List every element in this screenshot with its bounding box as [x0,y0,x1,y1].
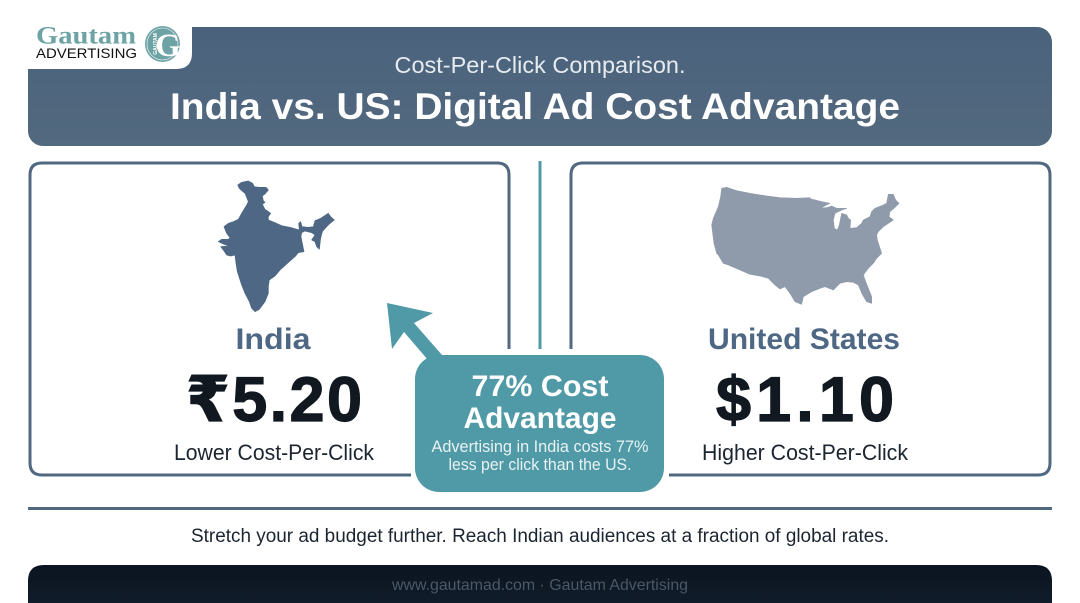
panel: India [30,163,509,475]
center divider [538,161,542,349]
callout: 77% cost advantage: Advantage [464,402,616,435]
logo badge [145,26,181,64]
icon: USA map [712,187,899,304]
United States label: United States [708,323,900,356]
arrow pointing to India [387,303,442,360]
bottom rule [28,507,1052,510]
callout: 77% cost advantage: less per click than the US. [448,456,632,474]
callout: 77% cost advantage [415,355,664,492]
US price: $1.10 [716,365,894,435]
logo badge: GAUTAM [153,33,159,55]
India label: India [236,323,311,356]
logo badge: G [155,28,181,64]
logo subtitle: ADVERTISING [36,46,137,61]
icon: India map [218,181,334,312]
logo: Gautam Advertising [28,22,192,69]
footer text: www.gautamad.com · Gautam Advertising [391,577,688,594]
panel: United States [571,163,1050,475]
callout body: Advertising in India costs 77% [432,438,649,456]
India price: ₹5.20 [186,365,362,435]
subtitle: Cost-Per-Click Comparison. [394,52,686,78]
US caption: Higher Cost-Per-Click [702,440,909,465]
logo wordmark: Gautam [36,22,136,50]
callout heading: 77% Cost [472,370,609,403]
footer bar [28,565,1052,603]
header banner [28,27,1052,146]
title: India vs. US: Digital Ad Cost Advantage [170,86,900,127]
tagline: Stretch your ad budget further. Reach Indian audiences at a fraction of global rates. [191,526,889,547]
India caption: Lower Cost-Per-Click [174,440,375,465]
